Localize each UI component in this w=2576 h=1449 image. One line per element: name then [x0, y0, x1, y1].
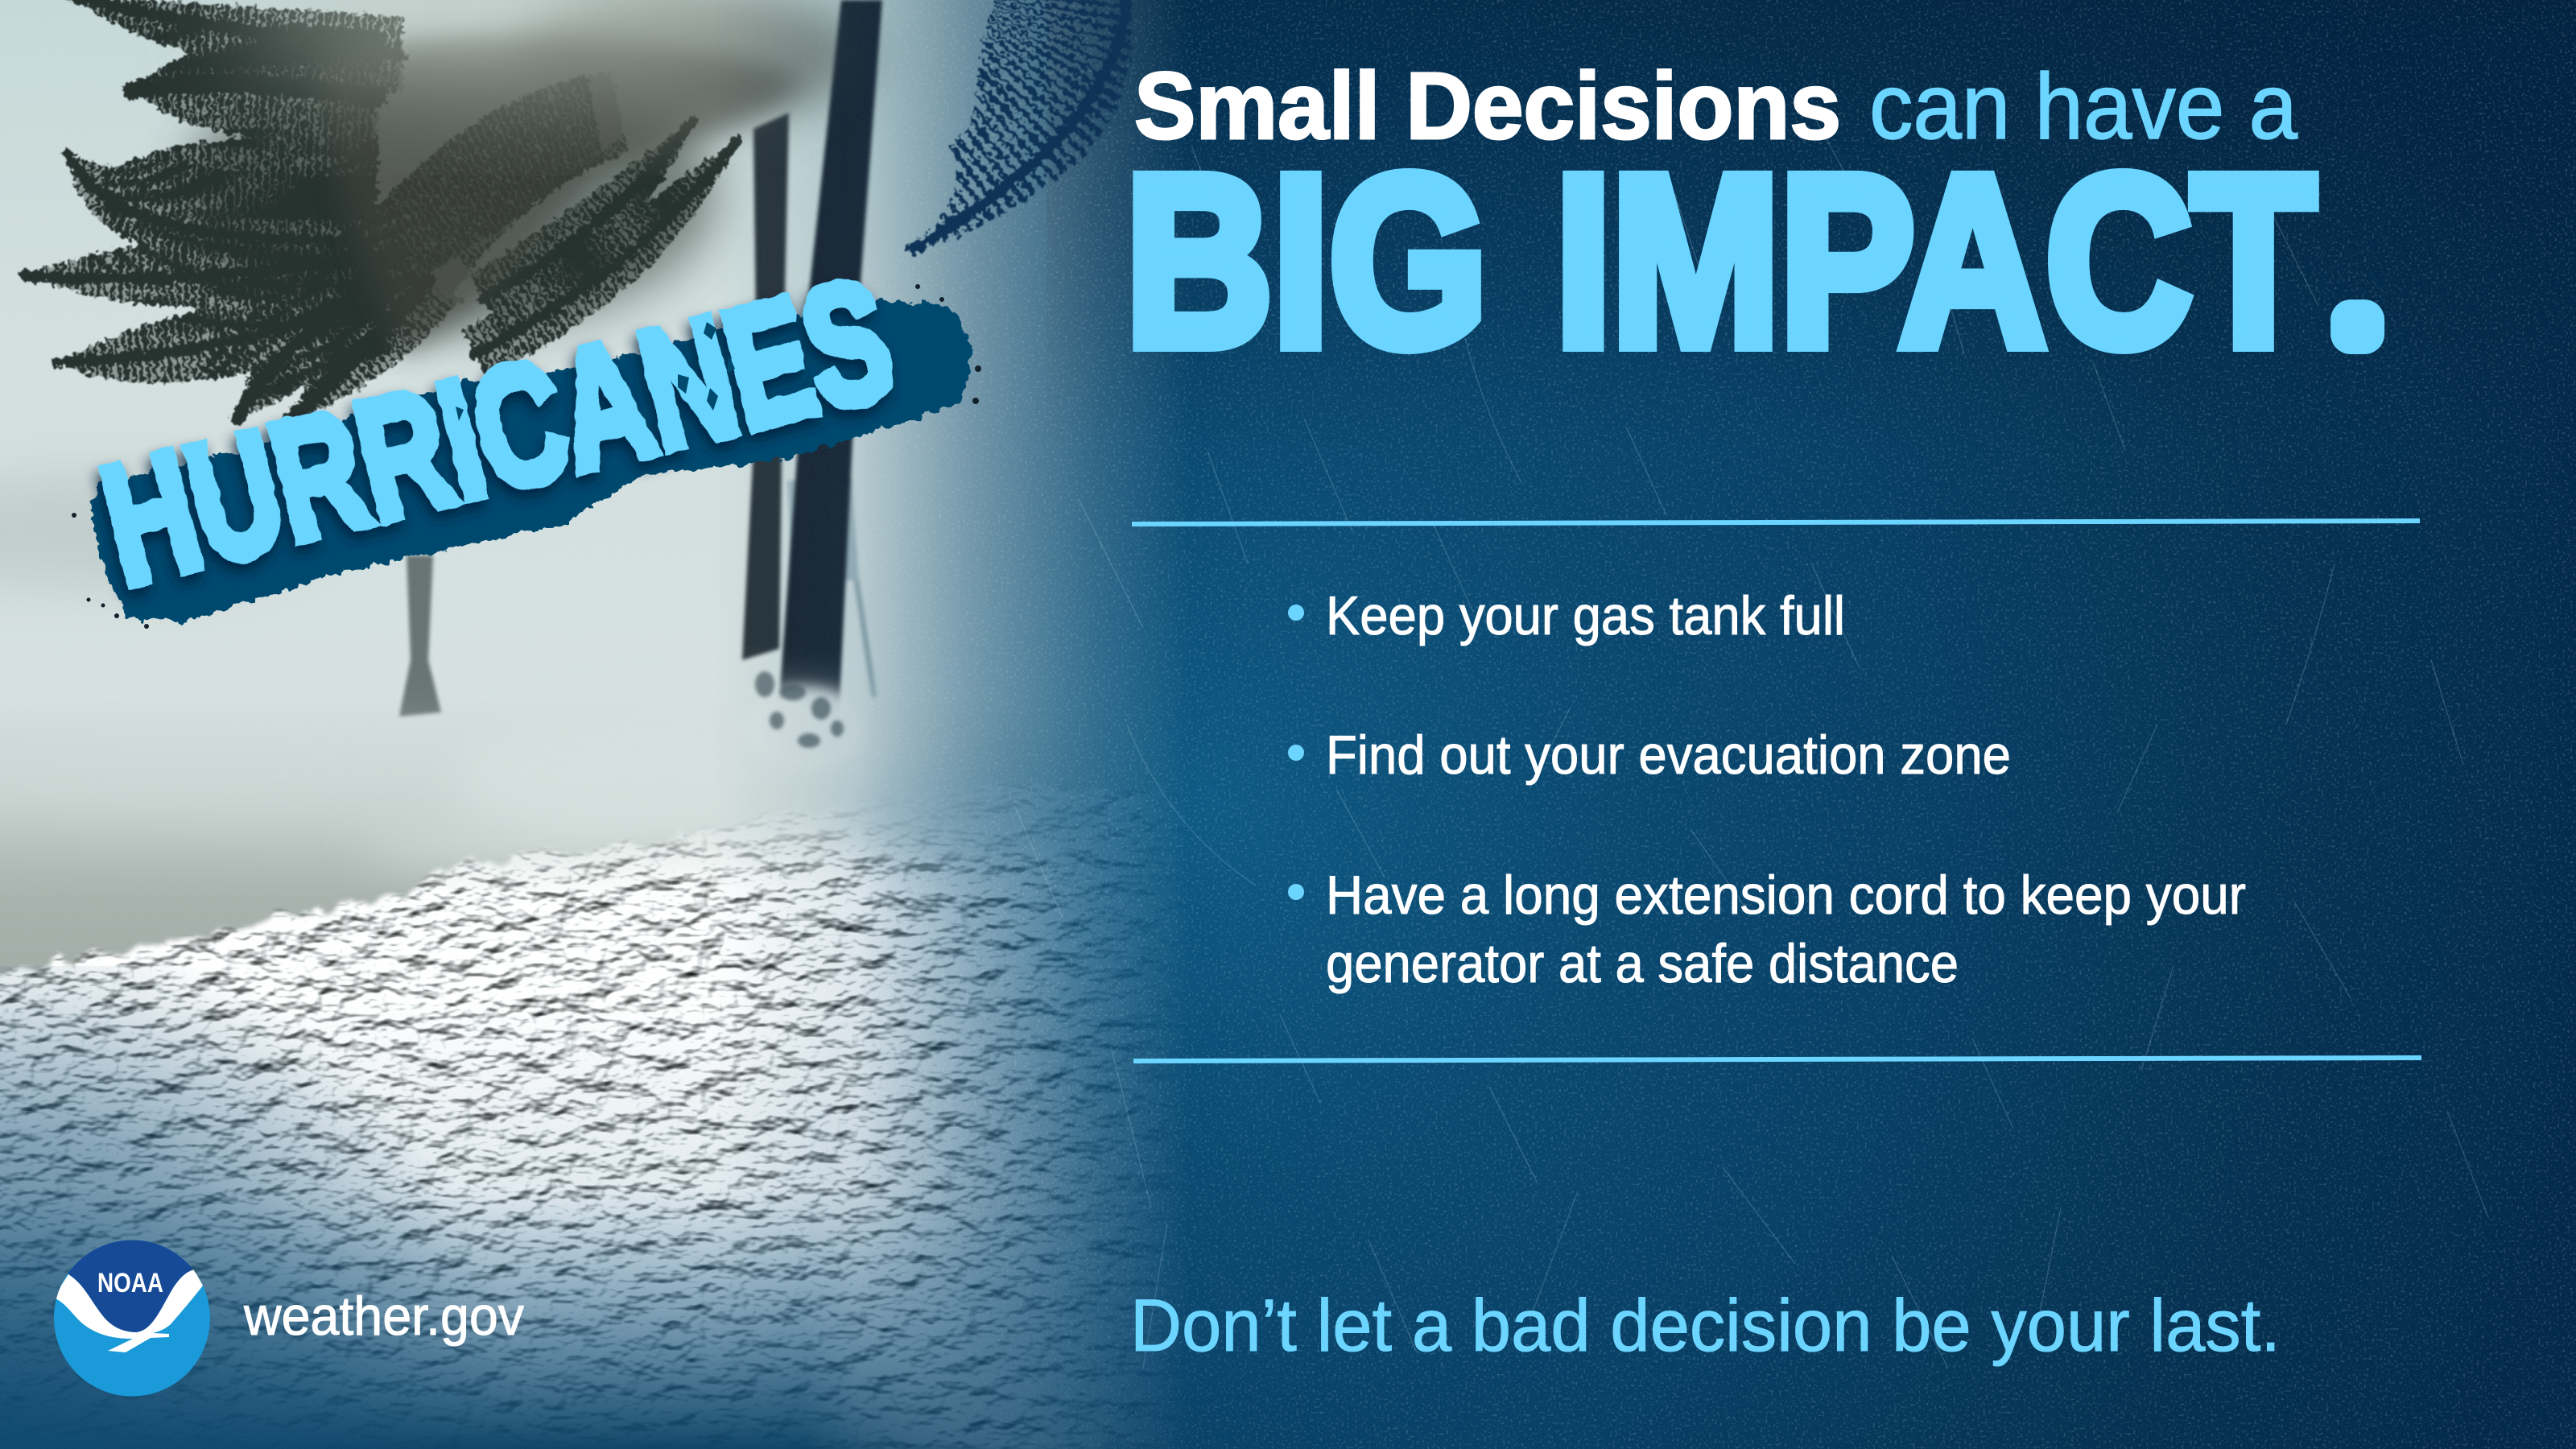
frond leaflets: [0, 0, 805, 451]
storm surge foam: [0, 724, 1288, 1449]
big impact: [1125, 126, 2371, 396]
small decisions: Small Decisions: [1134, 53, 1841, 159]
photo: hurricane palm trees and storm surge: [0, 0, 1288, 1449]
distressed nicks in letters: [456, 322, 735, 421]
divider top: [1132, 521, 2420, 524]
splash at trunk base: [744, 671, 866, 770]
warning sign: [787, 478, 874, 697]
back palm trunk: [742, 113, 789, 660]
bullet 1: Keep your gas tank full: [1326, 585, 1845, 646]
top-right palm frond: [910, 0, 1127, 258]
label text: HURRICANES: [86, 242, 909, 621]
distant palm trunk: [399, 555, 441, 716]
closing tagline: Don’t let a bad decision be your last.: [1130, 1285, 2281, 1367]
logo: NOAA: [54, 1232, 210, 1396]
palm fronds: [0, 0, 805, 451]
big impact: IMPACT: [1555, 126, 2315, 396]
website: weather.gov: [243, 1286, 524, 1347]
bullet 3: generator at a safe distance: [1326, 933, 1959, 994]
bullet list: [1288, 585, 2246, 994]
divider bottom: [1133, 1058, 2421, 1061]
main palm trunk: [779, 0, 882, 716]
top haze: [242, 0, 789, 89]
white bird wave: [56, 1269, 203, 1352]
can have a: can have a: [1869, 54, 2297, 159]
NOAA wordmark: NOAA: [97, 1268, 163, 1298]
big impact: .: [2344, 247, 2371, 355]
headline: [1125, 53, 2371, 396]
brush stroke behind label: [90, 300, 974, 621]
paint specks: [72, 284, 981, 629]
logo disc: [54, 1240, 210, 1396]
bullet 2: Find out your evacuation zone: [1326, 724, 2011, 786]
distant shore haze: [0, 469, 144, 594]
bullet 3: Have a long extension cord to keep your: [1326, 865, 2246, 926]
bullet 3: [1288, 865, 2246, 994]
banner: hurricanes: [72, 242, 981, 629]
sky and mist: [0, 0, 1288, 1449]
blue fade at bottom of photo: [0, 926, 1368, 1449]
palm crown dark mass: [321, 35, 805, 354]
spray above foam edge: [362, 696, 1095, 869]
palm crown haze: [185, 0, 869, 330]
big impact: BIG: [1125, 126, 1488, 396]
road mist band: [0, 724, 918, 837]
frond spines: [24, 0, 737, 423]
